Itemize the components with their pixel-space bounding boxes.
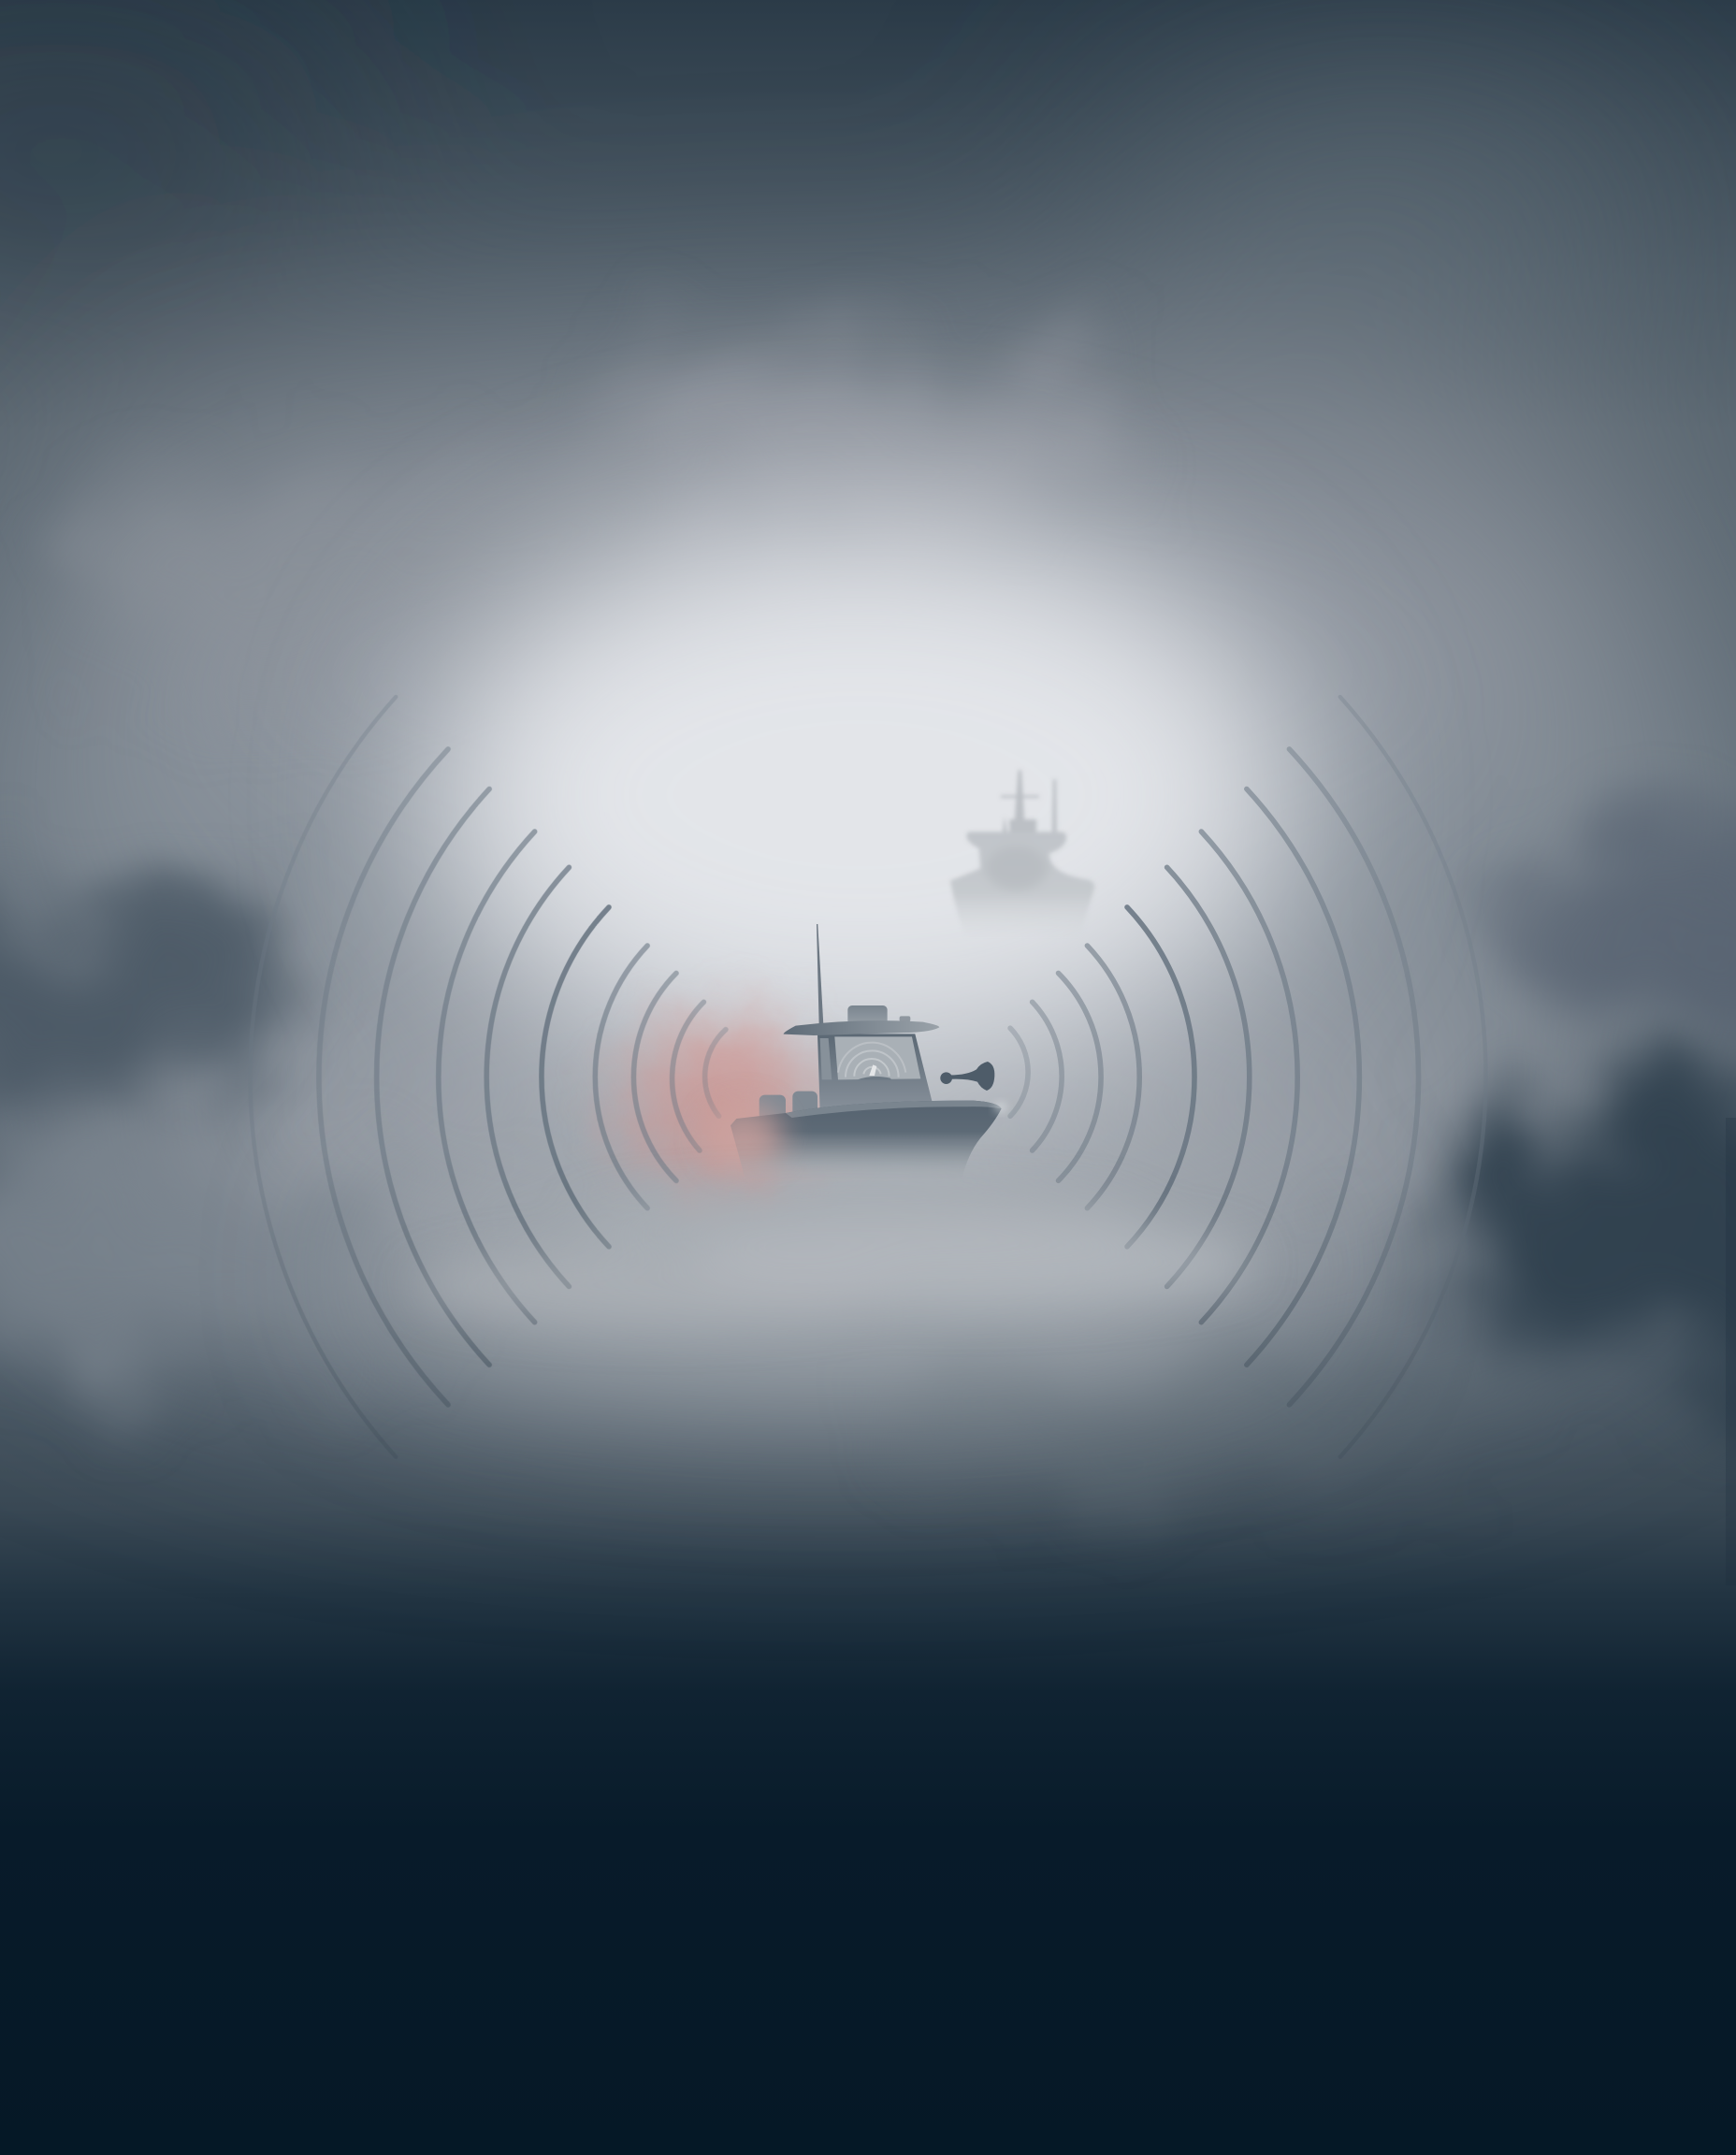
- signal arcs: left of the boat: [250, 697, 726, 1457]
- cabin: [817, 1034, 933, 1110]
- side window: [820, 1038, 832, 1079]
- foghorn: [940, 1062, 994, 1091]
- roof: [784, 1020, 939, 1035]
- hull: [731, 1101, 1002, 1179]
- distant ship silhouette: [950, 770, 1094, 935]
- front window with radar arcs: [834, 1036, 920, 1079]
- foreground fog over the hull: [412, 1194, 1253, 1323]
- antenna: [817, 924, 823, 1024]
- clouds: billowing mid-tones: [0, 346, 1736, 1468]
- fog: bright central clearing: [374, 514, 1309, 1380]
- gunwale: [786, 1101, 1002, 1118]
- seats: [760, 1092, 817, 1120]
- red port light glow: [585, 987, 865, 1221]
- bow spray highlight: [994, 1103, 1007, 1112]
- roof top box: [847, 1005, 888, 1025]
- roof knob: [900, 1016, 910, 1021]
- signal arcs: right of the boat: [1010, 697, 1486, 1457]
- fog: broad soft glow layers: [0, 0, 1736, 1375]
- small boat: [731, 924, 1007, 1179]
- red light tint on stern: [704, 1103, 783, 1170]
- right edge seam strip: [1726, 1118, 1736, 1585]
